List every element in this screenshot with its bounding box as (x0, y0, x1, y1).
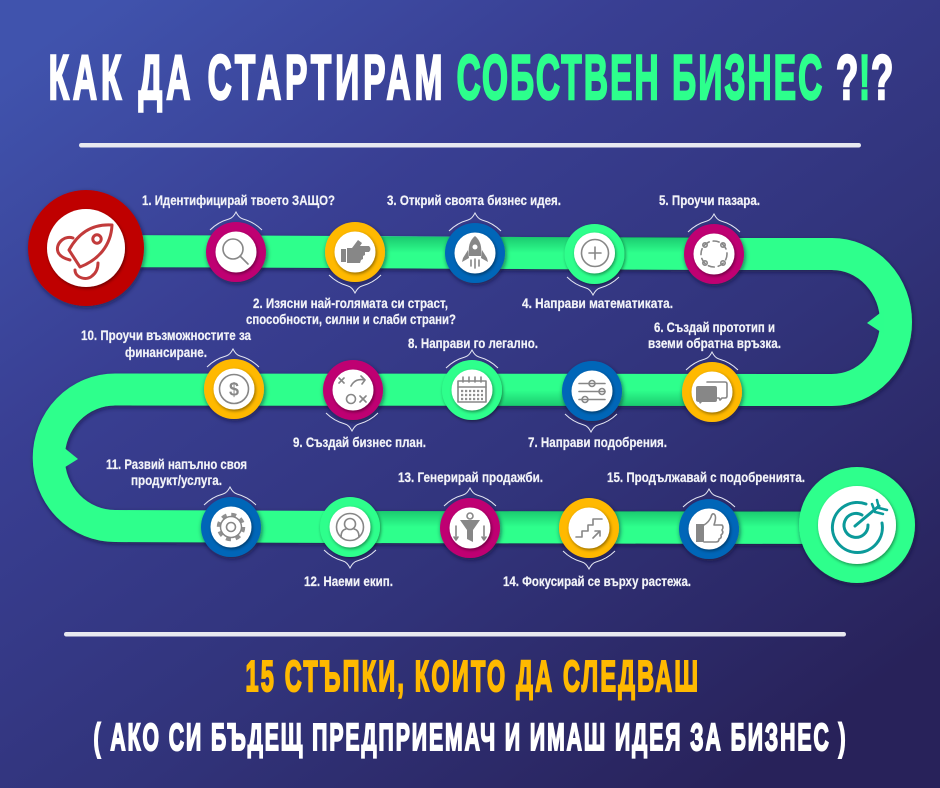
icon: cycle (701, 241, 727, 267)
label 15: 15. Продължавай с подобренията. (607, 470, 805, 485)
label 11 (106, 457, 247, 488)
icon: thumbs up (696, 514, 723, 542)
title: ! (859, 41, 870, 112)
icon: sales funnel (454, 513, 486, 542)
label 4: 4. Направи математиката. (522, 296, 673, 311)
icon: target with arrow (832, 500, 887, 552)
label 13: 13. Генерирай продажби. (398, 470, 543, 485)
icon: strategy plan (339, 376, 366, 404)
icon: chat bubbles (696, 382, 727, 404)
title: СОБСТВЕН БИЗНЕС (457, 41, 822, 112)
label 1: 1. Идентифицирай твоето ЗАЩО? (142, 193, 335, 208)
icon: calendar (458, 377, 486, 402)
icon: person (336, 514, 364, 540)
label 11: 11. Развий напълно своя (106, 457, 247, 472)
title: КАК ДА СТАРТИРАМ (49, 41, 442, 112)
label 6: 6. Създай прототип и (654, 320, 775, 335)
icon: growth stairs (576, 519, 602, 538)
winding road path (49, 237, 896, 543)
icon: sliders (579, 380, 605, 402)
step 8 (408, 336, 538, 420)
step 5 (659, 193, 760, 284)
step 1 (142, 193, 335, 282)
step 2 (246, 222, 456, 327)
label 6: вземи обратна връзка. (648, 336, 781, 351)
step 11 (106, 457, 261, 557)
icon: rocket launch (462, 236, 488, 268)
icon: rocket (57, 225, 112, 278)
label 11: продукт/услуга. (131, 473, 222, 488)
step 3 (387, 193, 561, 283)
step 13 (398, 470, 543, 558)
label 10: 10. Проучи възможностите за (81, 328, 251, 343)
label 3: 3. Открий своята бизнес идея. (387, 193, 561, 208)
start node: rocket (28, 190, 144, 306)
label 10: финансиране. (125, 345, 207, 360)
step 9 (293, 360, 426, 450)
label 5: 5. Проучи пазара. (659, 193, 760, 208)
title: ? (871, 41, 893, 112)
icon: gear (218, 514, 244, 540)
label 12: 12. Наеми екип. (304, 574, 393, 589)
label 14: 14. Фокусирай се върху растежа. (503, 574, 691, 589)
title (49, 41, 893, 112)
icon: plus in circle (582, 240, 608, 266)
label 2: 2. Изясни най-голямата си страст, (253, 296, 448, 311)
label 2 (246, 296, 456, 327)
icon: magnifier (223, 239, 248, 264)
step 12 (304, 497, 393, 589)
step 10 (81, 328, 264, 419)
step 4 (522, 224, 673, 311)
icon: dollar coin: $ (229, 380, 239, 400)
step 15 (607, 470, 805, 559)
tagline: ( АКО СИ БЪДЕЩ ПРЕДПРИЕМАЧ И ИМАШ ИДЕЯ ЗА БИЗНЕС ) (94, 717, 846, 759)
label 8: 8. Направи го легално. (408, 336, 538, 351)
title: ? (836, 41, 858, 112)
step 7 (528, 361, 667, 450)
label 10 (81, 328, 251, 360)
label 7: 7. Направи подобрения. (528, 435, 667, 450)
icon: pointing hand (341, 240, 370, 263)
icon: dollar coin (220, 374, 248, 404)
finish node: target (799, 467, 915, 583)
label 9: 9. Създай бизнес план. (293, 435, 426, 450)
step 14 (503, 498, 691, 589)
label 2: способности, силни и слаби страни? (246, 312, 456, 327)
subtitle: 15 СТЪПКИ, КОИТО ДА СЛЕДВАШ (246, 652, 698, 701)
label 6 (648, 320, 781, 351)
step 6 (648, 320, 781, 422)
